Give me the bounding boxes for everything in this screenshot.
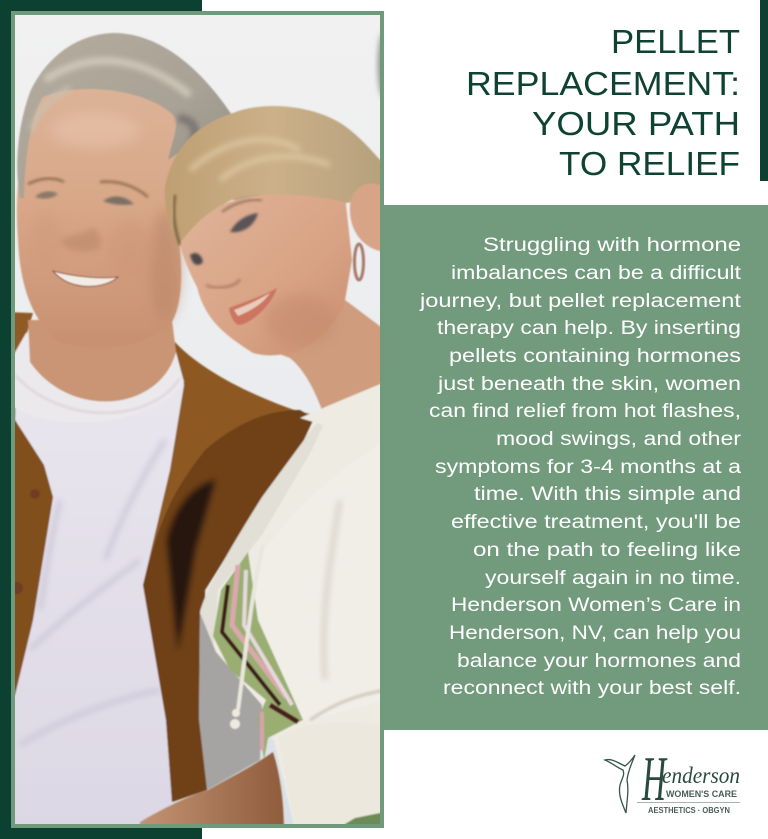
man's left jacket panel (15, 311, 52, 619)
woman's hair (165, 106, 385, 247)
man's eyes and brows (28, 178, 148, 197)
body paragraph: journey, but pellet replacement (419, 291, 742, 312)
man's undershirt (15, 383, 186, 824)
woman's ear (349, 183, 380, 252)
photo: smiling couple (5, 15, 390, 835)
grey inner shirt (199, 613, 262, 790)
woman's neck (280, 300, 380, 409)
body paragraph: mood swings, and other (496, 429, 742, 450)
body paragraph: balance your hormones and (457, 651, 741, 672)
body paragraph (419, 235, 742, 699)
man's nose shadow (62, 230, 101, 252)
body paragraph: reconnect with your best self. (443, 678, 741, 699)
body paragraph: Henderson Women’s Care in (451, 595, 741, 616)
woman's forearm (139, 752, 285, 824)
title: YOUR PATH (532, 105, 740, 142)
woman's hoodie (214, 421, 380, 819)
woman's face (178, 192, 352, 355)
title (466, 23, 740, 182)
body paragraph: time. With this simple and (474, 484, 741, 505)
man's neck and collar (15, 332, 186, 409)
body paragraph: therapy can help. By inserting (437, 318, 741, 339)
body paragraph: pellets containing hormones (449, 346, 741, 367)
woman's eyes (230, 213, 258, 232)
hoodie drawstring (229, 586, 256, 730)
woman's smile (229, 288, 277, 325)
title: REPLACEMENT: (466, 65, 740, 102)
body paragraph: on the path to feeling like (473, 540, 741, 561)
body paragraph: can find relief from hot flashes, (429, 401, 741, 422)
man's head (17, 33, 232, 348)
logo: Henderson Women's Care (605, 743, 740, 815)
dark green corner frame (0, 0, 202, 839)
woman's head (165, 106, 385, 355)
woman's nose shadow (206, 279, 240, 288)
man's hair (17, 33, 232, 198)
logo wordmark (641, 743, 740, 814)
man's face (16, 88, 182, 322)
body paragraph: symptoms for 3-4 months at a (435, 457, 742, 478)
man's smile (53, 271, 118, 286)
logo wordmark: H (641, 743, 668, 814)
title accent bar (760, 0, 768, 181)
body paragraph: effective treatment, you'll be (451, 512, 741, 533)
icon: dancing figure (605, 755, 635, 813)
logo wordmark: enderson (662, 763, 740, 788)
body paragraph: Struggling with hormone (483, 235, 741, 256)
photo border (13, 13, 382, 826)
logo subtitle: WOMEN'S CARE (666, 789, 737, 800)
body paragraph: Henderson, NV, can help you (449, 623, 741, 644)
title: PELLET (611, 23, 740, 60)
woman's hair behind (232, 194, 264, 201)
body paragraph: yourself again in no time. (485, 568, 741, 589)
logo tagline: AESTHETICS · OBGYN (648, 805, 730, 815)
man's right jacket panel (144, 342, 310, 802)
woman's hoop earring (354, 244, 364, 280)
panel: body text background (384, 205, 768, 730)
title: TO RELIEF (559, 145, 740, 182)
body paragraph: imbalances can be a difficult (451, 263, 742, 284)
striped top (213, 552, 303, 760)
body paragraph: just beneath the skin, women (437, 374, 741, 395)
